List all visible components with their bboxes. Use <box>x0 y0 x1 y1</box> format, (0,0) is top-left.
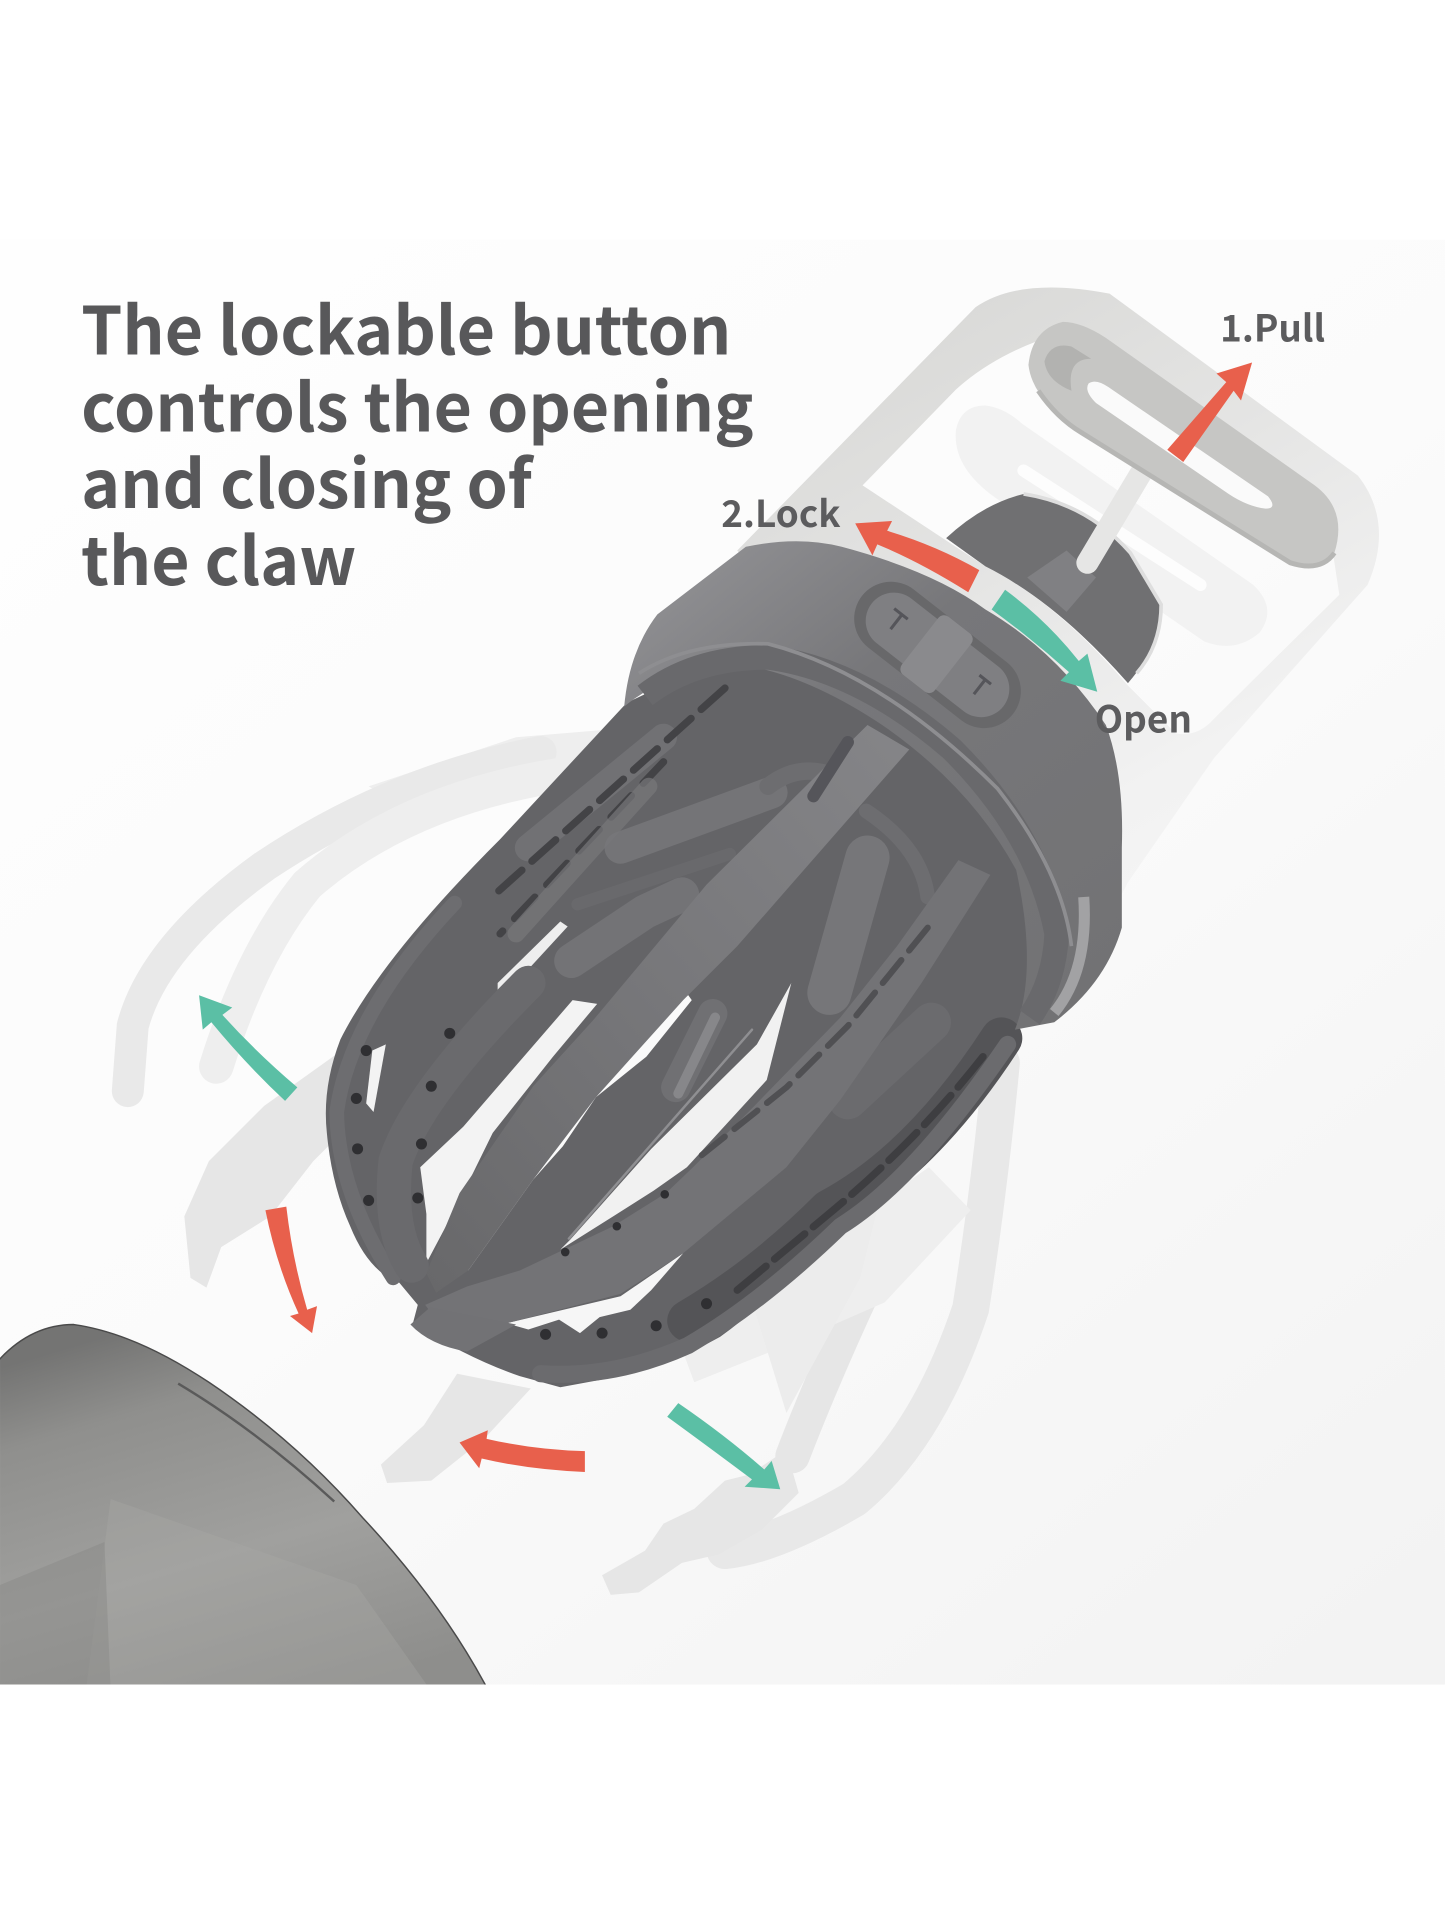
cage silhouette <box>326 639 1057 1387</box>
ghost claw: lower centre <box>381 1374 531 1483</box>
ring slot <box>1087 382 1272 509</box>
transparent cup <box>0 1325 488 1689</box>
gap: upper left sliver <box>498 922 568 1003</box>
ghost pull ring <box>956 405 1267 646</box>
arm: left outer slots <box>499 688 725 891</box>
linkage pieces <box>621 793 772 848</box>
arrow: lock <box>855 521 979 592</box>
arm: left upper translucent band <box>528 737 664 848</box>
ghost claw: lower right outer arm <box>725 1063 1001 1551</box>
ghost ring slot <box>1024 471 1200 585</box>
stem <box>1087 474 1140 563</box>
ring inner wall <box>1044 346 1091 391</box>
arrow: left red <box>265 1207 317 1333</box>
ring lower edge <box>1038 391 1334 566</box>
arm: centre front top slot <box>813 742 848 796</box>
arm: centre front <box>426 725 909 1293</box>
cylinder shaft <box>1027 550 1096 612</box>
gap: tooth slivers left <box>366 1044 386 1112</box>
ghost claw: lower right middle band <box>678 1167 971 1382</box>
arm: right outer bottom lip <box>541 1044 1008 1374</box>
arrow: bottom red <box>460 1430 585 1472</box>
cup shade <box>0 1542 111 1689</box>
claw tips <box>410 1307 516 1352</box>
title: controls the opening <box>81 355 754 451</box>
gap: slit beside centre arm <box>464 983 692 1270</box>
label: 2.Lock: 2.Lock <box>721 484 841 538</box>
ghost claw: lower right toothed tip <box>602 1450 799 1595</box>
interior ring <box>645 657 1057 1017</box>
collar band <box>624 541 1122 1030</box>
cylinder rim <box>1024 494 1161 673</box>
device: claw cage <box>326 639 1057 1387</box>
ghost claw: upper left inner <box>216 774 565 1067</box>
arrow: open <box>992 590 1097 692</box>
rim lip highlight <box>1054 897 1084 1012</box>
rim highlight <box>639 644 1071 946</box>
interior disc pieces <box>768 771 836 786</box>
gap: lower teeth <box>506 1253 683 1333</box>
ghost claw: lower right inner arm <box>793 1284 866 1456</box>
arm: right front slots <box>694 928 928 1161</box>
title: The lockable button <box>81 278 731 374</box>
ghost claw: upper left outer <box>128 752 541 1091</box>
arm: left second lighter <box>394 983 528 1266</box>
arm holes <box>351 1028 712 1340</box>
gap: right of central arm <box>560 983 791 1250</box>
ghost claw: middle left <box>184 1044 369 1288</box>
pull ring <box>1028 322 1338 566</box>
arm: right outer ribbed <box>688 1038 1001 1321</box>
arm: right front crescent <box>425 860 990 1323</box>
arrow: upper left teal <box>199 995 297 1101</box>
central component <box>676 1014 713 1087</box>
button slider <box>897 612 976 696</box>
label: Open: Open <box>1095 689 1192 743</box>
rear cylinder <box>946 494 1161 683</box>
ghost claw: upper left band <box>369 725 664 813</box>
title: and closing of <box>81 432 534 528</box>
cup highlight <box>299 1653 426 1684</box>
collar <box>624 541 1122 1030</box>
button glyphs <box>883 609 991 699</box>
button outer <box>839 567 1036 743</box>
arm: inner left strip <box>516 786 649 934</box>
ring outer <box>1028 322 1338 566</box>
button inner <box>854 581 1021 729</box>
label: 1.Pull: 1.Pull <box>1220 299 1325 353</box>
ghost ring body <box>956 405 1267 646</box>
ghost claws: open position <box>128 725 1001 1595</box>
handle frame <box>737 287 1379 1020</box>
gap: left of centre arm <box>420 1000 597 1263</box>
arm: left outer lip <box>337 903 455 1278</box>
title: the claw <box>81 509 356 605</box>
arrow: bottom teal <box>667 1403 780 1489</box>
cylinder body <box>946 494 1161 683</box>
ghost claw: behind cage <box>737 1180 885 1413</box>
panel: light grey background <box>0 240 1445 1685</box>
button slot <box>839 567 1036 743</box>
arrow: pull <box>1167 362 1252 462</box>
